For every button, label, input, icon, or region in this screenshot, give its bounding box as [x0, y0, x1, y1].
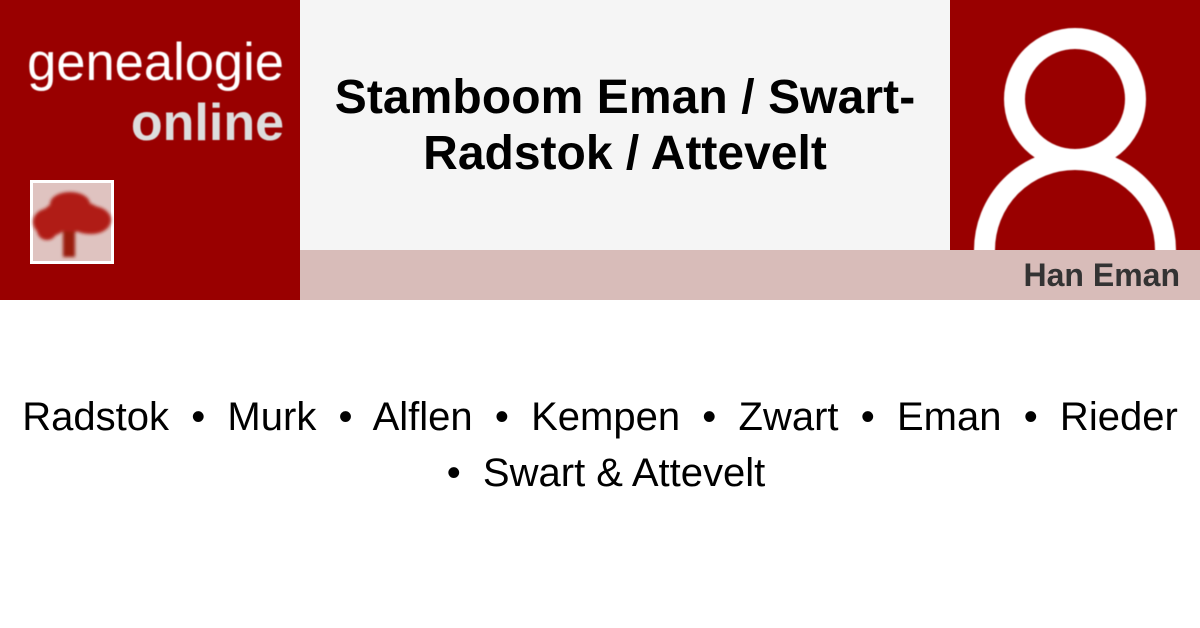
text block: family names: • Swart & Attevelt — [447, 451, 765, 495]
text block: family names — [22, 395, 1178, 495]
title: Radstok / Attevelt — [423, 127, 827, 180]
title — [335, 71, 915, 180]
logo word: online: online — [131, 94, 284, 152]
text block: family names: Radstok • Murk • Alflen • Kempen • Zwart • Eman • Rieder — [22, 395, 1178, 439]
logo word: genealogie: genealogie — [27, 33, 284, 92]
icon: person avatar — [950, 0, 1200, 250]
icon: tree thumbnail — [30, 180, 114, 264]
author name: Han Eman — [1024, 257, 1180, 293]
title: Stamboom Eman / Swart- — [335, 71, 915, 124]
panel: author bar — [300, 250, 1200, 300]
panel: title background — [300, 0, 950, 250]
panel: logo block — [0, 0, 300, 300]
